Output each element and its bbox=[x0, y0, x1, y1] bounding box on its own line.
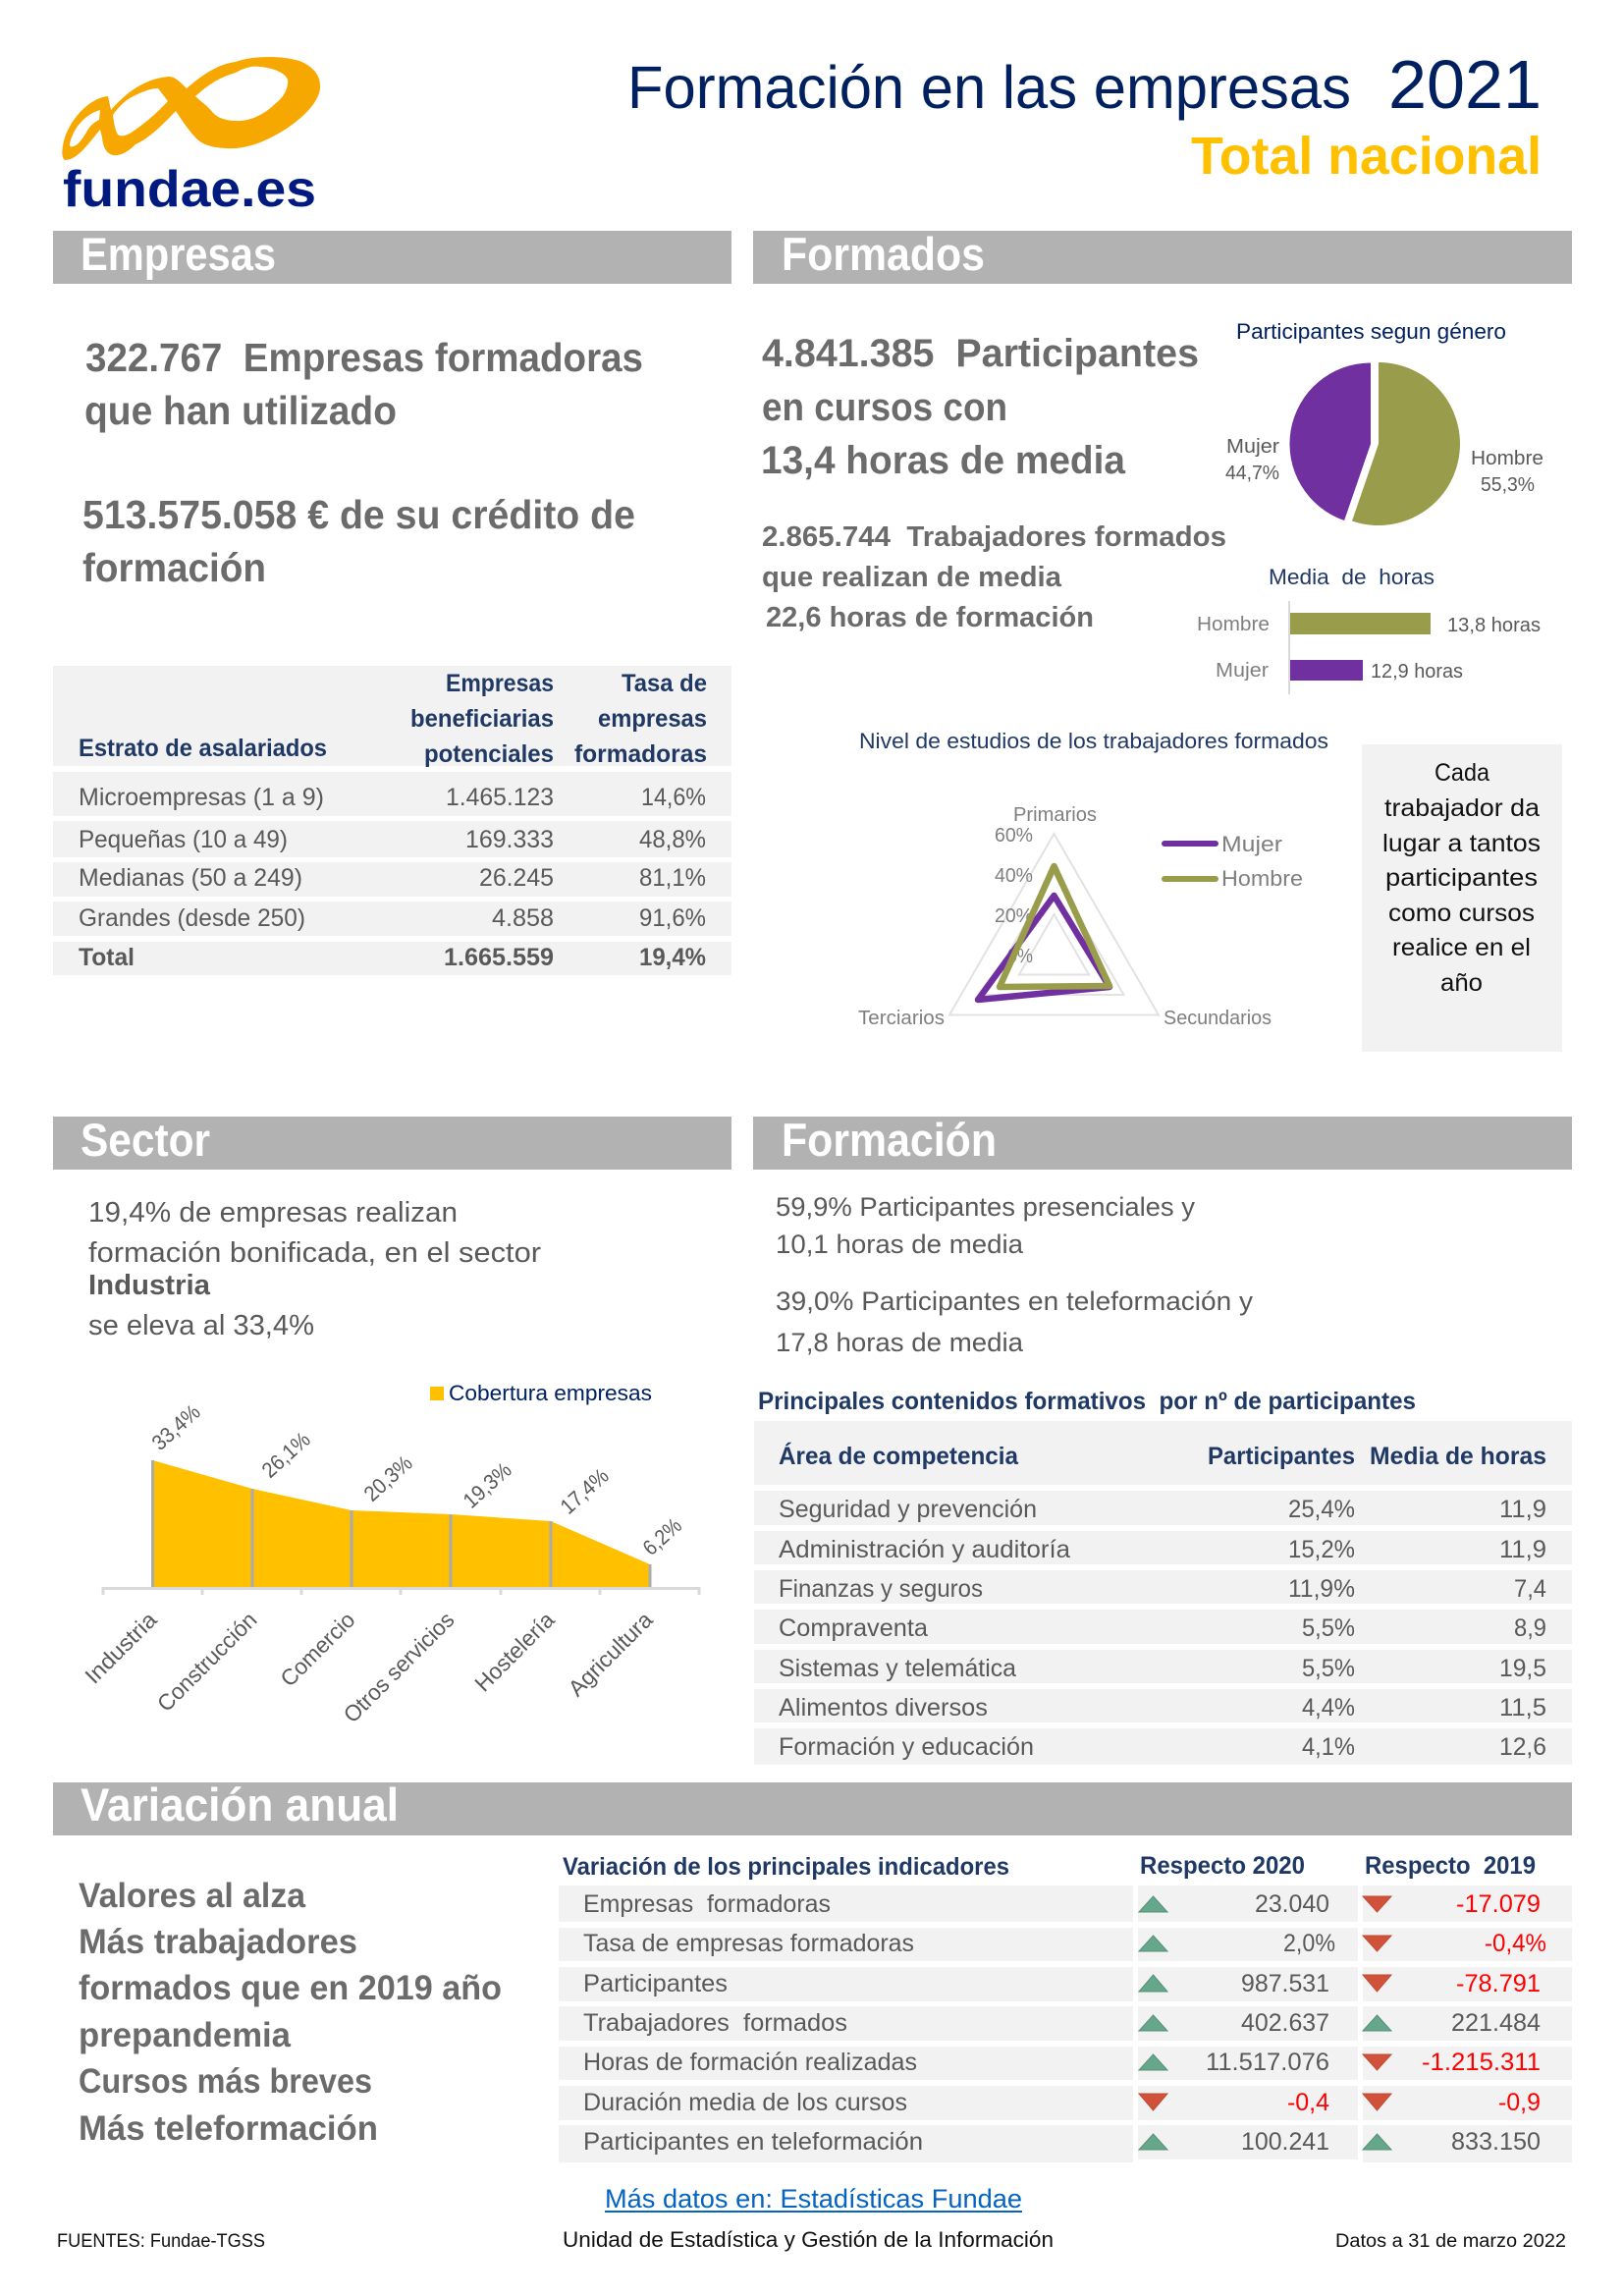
text block: valores al alza bbox=[79, 1877, 502, 2148]
table rows: 14,6% bbox=[641, 784, 706, 811]
table header: Respecto 2019 bbox=[1365, 1852, 1536, 1880]
indicator labels: Duración media de los cursos bbox=[583, 2089, 907, 2116]
radar chart: nivel de estudios: 20% bbox=[995, 905, 1033, 927]
text block: sector: formación bonificada, en el sector bbox=[88, 1237, 541, 1269]
callout: cada trabajador: trabajador da bbox=[1384, 794, 1540, 822]
radar chart: nivel de estudios: Nivel de estudios de los trabajadores formados bbox=[859, 729, 1328, 753]
table rows: 5,5% bbox=[1302, 1655, 1355, 1682]
category labels: Comercio bbox=[275, 1607, 360, 1691]
text block: valores al alza: prepandemia bbox=[79, 2016, 292, 2054]
callout: cada trabajador: como cursos bbox=[1388, 900, 1535, 927]
radar chart: nivel de estudios: 0% bbox=[1007, 946, 1033, 967]
callout: cada trabajador: participantes bbox=[1385, 864, 1538, 892]
radar chart: nivel de estudios: Primarios bbox=[1013, 804, 1097, 826]
section heading: Sector bbox=[53, 1114, 731, 1170]
text block: formación: 59,9% Participantes presenciales y bbox=[776, 1192, 1196, 1222]
values respecto 2019: -0,9 bbox=[1498, 2089, 1541, 2116]
table rows: 7,4 bbox=[1514, 1575, 1546, 1603]
table rows: 169.333 bbox=[465, 826, 554, 853]
text block: participantes: que realizan de media bbox=[762, 562, 1062, 593]
text block: valores al alza: Cursos más breves bbox=[79, 2062, 372, 2101]
callout: cada trabajador bbox=[1362, 744, 1562, 1052]
section heading: Empresas bbox=[53, 228, 731, 284]
text block: sector: se eleva al 33,4% bbox=[88, 1310, 314, 1341]
icons: trend arrows bbox=[1139, 1896, 1391, 2150]
subtitle: Total nacional: Total nacional bbox=[1191, 127, 1542, 186]
radar chart: nivel de estudios: Terciarios bbox=[858, 1008, 945, 1029]
callout: cada trabajador: lugar a tantos bbox=[1382, 830, 1541, 857]
section heading: Formados: Formados bbox=[782, 228, 985, 280]
table header: Tasa de bbox=[622, 670, 707, 697]
bar chart: media de horas: 12,9 horas bbox=[1371, 661, 1463, 683]
table rows: 4,4% bbox=[1302, 1694, 1355, 1722]
footer: fecha: Datos a 31 de marzo 2022 bbox=[1335, 2231, 1566, 2252]
radar chart: nivel de estudios: Secundarios bbox=[1164, 1008, 1272, 1029]
footer: unidad: Unidad de Estadística y Gestión de la Información bbox=[563, 2227, 1054, 2252]
values respecto 2019: -0,4% bbox=[1485, 1930, 1546, 1957]
indicator labels: Participantes en teleformación bbox=[583, 2128, 923, 2156]
section heading: Sector: Sector bbox=[81, 1114, 210, 1166]
table rows: 25,4% bbox=[1288, 1496, 1355, 1523]
data labels: 19,3% bbox=[459, 1457, 516, 1513]
section heading: Formación: Formación bbox=[782, 1114, 997, 1166]
table rows: 11,9 bbox=[1499, 1496, 1546, 1523]
indicator labels: Trabajadores formados bbox=[583, 2009, 847, 2037]
indicator labels: Empresas formadoras bbox=[583, 1890, 831, 1918]
data labels: 20,3% bbox=[359, 1450, 417, 1506]
logo: fundae.es bbox=[62, 57, 320, 218]
text block: empresas formadoras: que han utilizado bbox=[84, 388, 397, 433]
table rows: Formación y educación bbox=[779, 1733, 1034, 1761]
callout: cada trabajador: año bbox=[1440, 969, 1483, 997]
table rows: 5,5% bbox=[1302, 1614, 1355, 1642]
section heading: Formación bbox=[753, 1114, 1572, 1170]
section heading: Variación anual: Variación anual bbox=[81, 1778, 399, 1831]
radar legend bbox=[1164, 832, 1303, 891]
table rows: 26.245 bbox=[479, 864, 554, 892]
table header: Empresas bbox=[446, 670, 554, 697]
table: principales contenidos formativos: Principales contenidos formativos por nº de participantes bbox=[758, 1388, 1416, 1415]
table rows: Pequeñas (10 a 49) bbox=[79, 826, 288, 853]
values respecto 2020: 11.517.076 bbox=[1206, 2049, 1329, 2076]
data labels: 17,4% bbox=[556, 1463, 614, 1519]
text block: valores al alza: Más teleformación bbox=[79, 2109, 378, 2148]
table rows: Grandes (desde 250) bbox=[79, 904, 305, 932]
values respecto 2019: -78.791 bbox=[1456, 1970, 1541, 1997]
values respecto 2020: 987.531 bbox=[1241, 1970, 1329, 1997]
table rows: 11,5 bbox=[1499, 1694, 1546, 1722]
bar chart: media de horas bbox=[1197, 565, 1541, 694]
callout: cada trabajador: Cada bbox=[1435, 759, 1489, 787]
category labels: Industria bbox=[80, 1607, 162, 1689]
values respecto 2019: 221.484 bbox=[1451, 2009, 1541, 2037]
radar legend: Hombre bbox=[1221, 866, 1303, 891]
table rows: 1.465.123 bbox=[446, 784, 554, 811]
table rows: Administración y auditoría bbox=[779, 1536, 1070, 1563]
table rows: 12,6 bbox=[1499, 1733, 1546, 1761]
table header: Media de horas bbox=[1370, 1443, 1546, 1470]
text block: participantes bbox=[761, 332, 1226, 633]
values respecto 2020: -0,4 bbox=[1287, 2089, 1329, 2116]
text block: valores al alza: Más trabajadores bbox=[79, 1923, 357, 1961]
text block: sector bbox=[88, 1197, 541, 1341]
values respecto 2020: 23.040 bbox=[1255, 1890, 1329, 1918]
text block: participantes: 2.865.744 Trabajadores formados bbox=[762, 521, 1226, 553]
text block: participantes: 13,4 horas de media bbox=[761, 439, 1126, 482]
values respecto 2019 bbox=[1422, 1890, 1546, 2156]
logo: fundae.es: fundae.es bbox=[63, 161, 316, 218]
text block: empresas formadoras: 322.767 Empresas formadoras bbox=[85, 335, 643, 380]
category labels: Construcción bbox=[152, 1607, 262, 1717]
table rows: 15,2% bbox=[1288, 1536, 1355, 1563]
text block: empresas formadoras: formación bbox=[82, 545, 266, 590]
table header: Variación de los principales indicadores bbox=[563, 1853, 1009, 1881]
table rows: Seguridad y prevención bbox=[779, 1496, 1037, 1523]
category labels: Otros servicios bbox=[338, 1607, 460, 1727]
table rows bbox=[779, 1496, 1546, 1761]
table rows bbox=[79, 784, 706, 971]
title: Formación en las empresas bbox=[627, 54, 1351, 121]
indicator labels: Participantes bbox=[583, 1970, 728, 1997]
category labels: Agricultura bbox=[563, 1607, 658, 1701]
data labels: 33,4% bbox=[147, 1399, 205, 1455]
table header: Área de competencia bbox=[779, 1442, 1019, 1470]
table rows: 19,5 bbox=[1499, 1655, 1546, 1682]
indicator labels bbox=[583, 1890, 923, 2156]
table rows: 19,4% bbox=[639, 944, 706, 971]
category labels: Hostelería bbox=[469, 1607, 560, 1696]
table: estrato de asalariados bbox=[53, 666, 731, 975]
table rows: 11,9% bbox=[1288, 1575, 1355, 1603]
table rows: 11,9 bbox=[1499, 1536, 1546, 1563]
indicator labels: Horas de formación realizadas bbox=[583, 2049, 917, 2076]
table rows: 91,6% bbox=[639, 904, 706, 932]
table rows: 1.665.559 bbox=[444, 944, 554, 971]
radar legend: Mujer bbox=[1221, 832, 1282, 856]
table rows: Total bbox=[79, 944, 135, 971]
radar chart: nivel de estudios bbox=[858, 729, 1328, 1029]
values respecto 2020: 2,0% bbox=[1283, 1930, 1335, 1957]
pie chart: participantes según género: Hombre bbox=[1471, 448, 1543, 469]
category labels bbox=[80, 1607, 658, 1727]
text block: empresas formadoras: 513.575.058 € de su crédito de bbox=[82, 492, 635, 537]
section heading: Empresas: Empresas bbox=[81, 228, 276, 280]
text block: empresas formadoras bbox=[82, 335, 643, 590]
table header: potenciales bbox=[424, 740, 554, 768]
indicator labels: Tasa de empresas formadoras bbox=[583, 1930, 914, 1957]
pie chart: participantes según género: 44,7% bbox=[1225, 463, 1279, 484]
table rows: 81,1% bbox=[639, 864, 706, 892]
table header bbox=[779, 1442, 1546, 1470]
table: variación de los principales indicadores bbox=[559, 1852, 1572, 2162]
table rows: Sistemas y telemática bbox=[779, 1655, 1016, 1682]
table rows: 4.858 bbox=[492, 904, 554, 932]
table rows: 8,9 bbox=[1514, 1614, 1546, 1642]
table rows: 48,8% bbox=[639, 826, 706, 853]
table rows: 4,1% bbox=[1302, 1733, 1355, 1761]
table header: Participantes bbox=[1208, 1443, 1355, 1470]
footer: fuentes: FUENTES: Fundae-TGSS bbox=[57, 2231, 265, 2252]
table header: formadoras bbox=[574, 740, 707, 768]
table header: Respecto 2020 bbox=[1140, 1852, 1305, 1880]
values respecto 2020 bbox=[1206, 1890, 1335, 2156]
bar chart: media de horas: Media de horas bbox=[1269, 565, 1435, 589]
text block: participantes: 4.841.385 Participantes bbox=[762, 332, 1199, 375]
radar chart: nivel de estudios: 60% bbox=[995, 825, 1033, 847]
text block: participantes: en cursos con bbox=[762, 386, 1007, 429]
radar chart: nivel de estudios: 40% bbox=[995, 865, 1033, 887]
values respecto 2019: 833.150 bbox=[1451, 2128, 1541, 2156]
section heading: Formados bbox=[753, 228, 1572, 284]
table: principales contenidos formativos bbox=[754, 1388, 1572, 1765]
table rows: Compraventa bbox=[779, 1614, 928, 1642]
table header bbox=[79, 670, 707, 768]
values respecto 2019: -1.215.311 bbox=[1422, 2049, 1541, 2076]
chart legend: Cobertura empresas bbox=[449, 1381, 652, 1405]
values respecto 2020: 100.241 bbox=[1241, 2128, 1329, 2156]
table rows: Alimentos diversos bbox=[779, 1694, 988, 1722]
pie chart: participantes según género: 55,3% bbox=[1481, 474, 1535, 496]
text block: valores al alza: formados que en 2019 año bbox=[79, 1969, 502, 2007]
pie chart: participantes según género: Mujer bbox=[1226, 436, 1279, 458]
table rows: Finanzas y seguros bbox=[779, 1575, 983, 1603]
table header: beneficiarias bbox=[410, 705, 554, 733]
bar chart: media de horas: Mujer bbox=[1216, 660, 1269, 682]
data labels: 6,2% bbox=[638, 1513, 686, 1560]
values respecto 2019: -17.079 bbox=[1456, 1890, 1541, 1918]
section heading: Variación anual bbox=[53, 1778, 1572, 1835]
data labels: 26,1% bbox=[257, 1427, 315, 1483]
text block: sector: Industria bbox=[88, 1270, 211, 1301]
bar chart: media de horas: Hombre bbox=[1197, 614, 1270, 635]
pie chart: participantes según género bbox=[1225, 319, 1543, 525]
link: más datos: Más datos en: Estadísticas Fundae bbox=[605, 2184, 1022, 2214]
pie chart: participantes según género: Participantes segun género bbox=[1236, 319, 1506, 344]
bar chart: media de horas: 13,8 horas bbox=[1447, 615, 1541, 636]
data labels bbox=[147, 1399, 686, 1560]
text block: sector: 19,4% de empresas realizan bbox=[88, 1197, 458, 1229]
values respecto 2020: 402.637 bbox=[1241, 2009, 1329, 2037]
text block: participantes: 22,6 horas de formación bbox=[766, 602, 1094, 633]
table header: Estrato de asalariados bbox=[79, 735, 327, 762]
area chart: cobertura empresas por sector bbox=[80, 1381, 699, 1727]
text block: formación: 17,8 horas de media bbox=[776, 1328, 1024, 1357]
callout: cada trabajador: realice en el bbox=[1392, 934, 1531, 961]
table rows: Medianas (50 a 249) bbox=[79, 864, 302, 892]
table header bbox=[563, 1852, 1536, 1881]
text block: formación: 10,1 horas de media bbox=[776, 1230, 1024, 1259]
text block: valores al alza: Valores al alza bbox=[79, 1877, 306, 1915]
text block: formación: 39,0% Participantes en teleformación y bbox=[776, 1286, 1254, 1316]
text block: formación bbox=[776, 1192, 1254, 1357]
table rows: Microempresas (1 a 9) bbox=[79, 784, 324, 811]
title: 2021 bbox=[1388, 46, 1542, 123]
table header: empresas bbox=[598, 705, 707, 733]
